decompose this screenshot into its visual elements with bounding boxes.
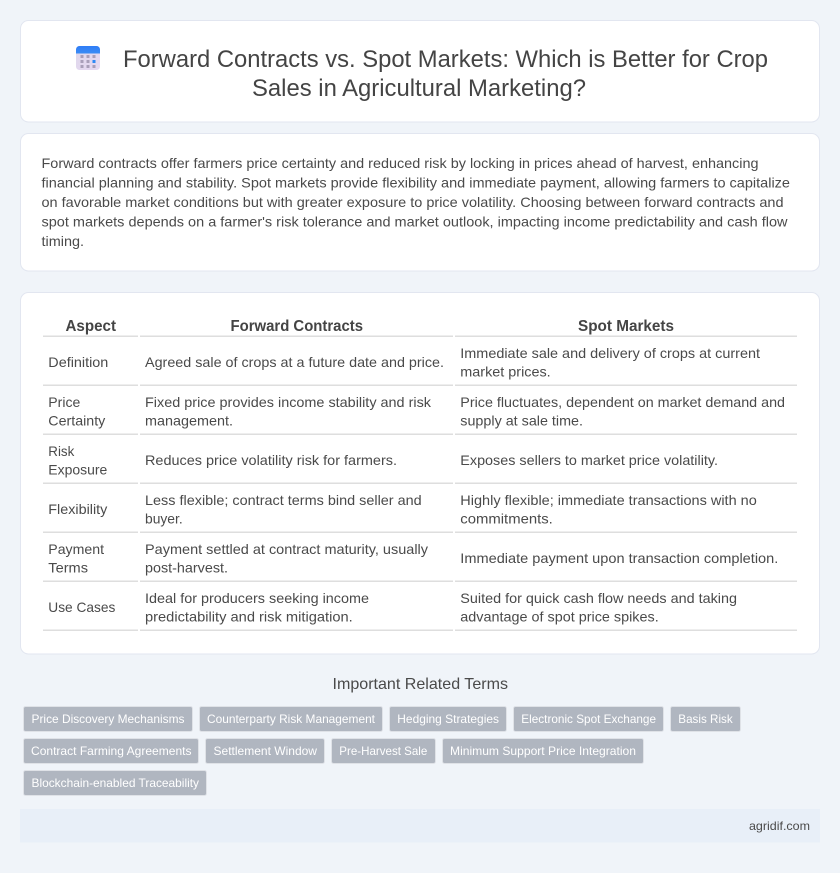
row: risk exposure [48, 443, 718, 478]
row: price certainty: management. [145, 412, 233, 428]
header panel [20, 20, 820, 122]
row: flexibility: commitments. [460, 510, 553, 526]
row: flexibility: Less flexible; contract terms bind seller and [145, 492, 422, 508]
row: payment terms: Payment settled at contract maturity, usually [145, 541, 428, 557]
row: use cases: Use Cases [48, 599, 115, 615]
row: definition: market prices. [460, 364, 551, 380]
tag: Blockchain-enabled Traceability [32, 776, 199, 790]
row: flexibility: Highly flexible; immediate transactions with no [460, 492, 757, 508]
table header: Aspect [66, 318, 117, 335]
title: Sales in Agricultural Marketing? [252, 75, 586, 102]
row: risk exposure: Exposes sellers to market price volatility. [460, 452, 718, 468]
row: use cases [48, 590, 737, 624]
tag [24, 738, 198, 764]
row: payment terms [48, 541, 778, 576]
row: payment terms: post-harvest. [145, 560, 228, 576]
row: price certainty: supply at sale time. [460, 412, 583, 428]
row: flexibility: Flexibility [48, 501, 107, 517]
intro text panel: spot markets depends on a farmer's risk tolerance and market outlook, impacting income predictability and cash flow [42, 214, 788, 230]
intro text panel: financial planning and stability. Spot markets provide flexibility and immediate payment, allowing farmers to capitalize [42, 174, 790, 190]
row: price certainty [48, 394, 785, 428]
tag [332, 738, 436, 764]
icon: calendar [76, 46, 100, 70]
row: price certainty: Price fluctuates, dependent on market demand and [460, 394, 785, 410]
row: payment terms: Immediate payment upon transaction completion. [460, 550, 778, 566]
row: payment terms: Payment [48, 541, 104, 557]
table header: Spot Markets [578, 318, 674, 335]
row: price certainty: Price [48, 394, 81, 410]
row: flexibility: buyer. [145, 510, 183, 526]
row: use cases: advantage of spot price spikes. [460, 608, 659, 624]
tag [670, 706, 740, 732]
tag [200, 706, 382, 732]
tag [24, 706, 192, 732]
intro text panel: Forward contracts offer farmers price certainty and reduced risk by locking in prices ahead of harvest, enhancing [42, 155, 758, 171]
tag: Minimum Support Price Integration [450, 744, 636, 758]
intro text panel [20, 134, 820, 271]
row: price certainty: Fixed price provides income stability and risk [145, 394, 432, 410]
title: Forward Contracts vs. Spot Markets: Which is Better for Crop [123, 46, 768, 73]
title [123, 46, 768, 102]
row: definition [48, 345, 760, 380]
row: definition: Immediate sale and delivery of crops at current [460, 345, 760, 361]
table header [66, 318, 674, 335]
footer bar [20, 809, 820, 842]
tag [206, 738, 324, 764]
tag [390, 706, 506, 732]
row: price certainty: Certainty [48, 412, 105, 428]
tag: Settlement Window [214, 744, 317, 758]
intro text panel: on favorable market conditions but with greater exposure to price volatility. Choosing between forward contracts and [42, 194, 784, 210]
row: use cases: Ideal for producers seeking income [145, 590, 369, 606]
related terms heading: Important Related Terms [332, 676, 508, 693]
tag [514, 706, 664, 732]
row: risk exposure: Reduces price volatility risk for farmers. [145, 452, 397, 468]
row: risk exposure: Exposure [48, 462, 108, 478]
row: definition: Definition [48, 354, 108, 370]
tag [442, 738, 644, 764]
related terms tags [24, 706, 740, 796]
footer bar: agridif.com [749, 819, 810, 833]
table header: Forward Contracts [230, 318, 363, 335]
tag: Pre-Harvest Sale [339, 744, 428, 758]
tag: Electronic Spot Exchange [521, 712, 656, 726]
row: use cases: predictability and risk mitigation. [145, 608, 353, 624]
tag: Contract Farming Agreements [31, 744, 192, 758]
tag: Hedging Strategies [397, 712, 499, 726]
row: definition: Agreed sale of crops at a future date and price. [145, 354, 444, 370]
row: risk exposure: Risk [48, 443, 75, 459]
tag [24, 770, 206, 796]
row: use cases: Suited for quick cash flow needs and taking [460, 590, 737, 606]
tag: Counterparty Risk Management [207, 712, 376, 726]
comparison table panel [20, 292, 820, 654]
intro text panel: timing. [42, 233, 84, 249]
tag: Basis Risk [678, 712, 734, 726]
row: payment terms: Terms [48, 560, 88, 576]
tag: Price Discovery Mechanisms [32, 712, 184, 726]
row: flexibility [48, 492, 757, 526]
